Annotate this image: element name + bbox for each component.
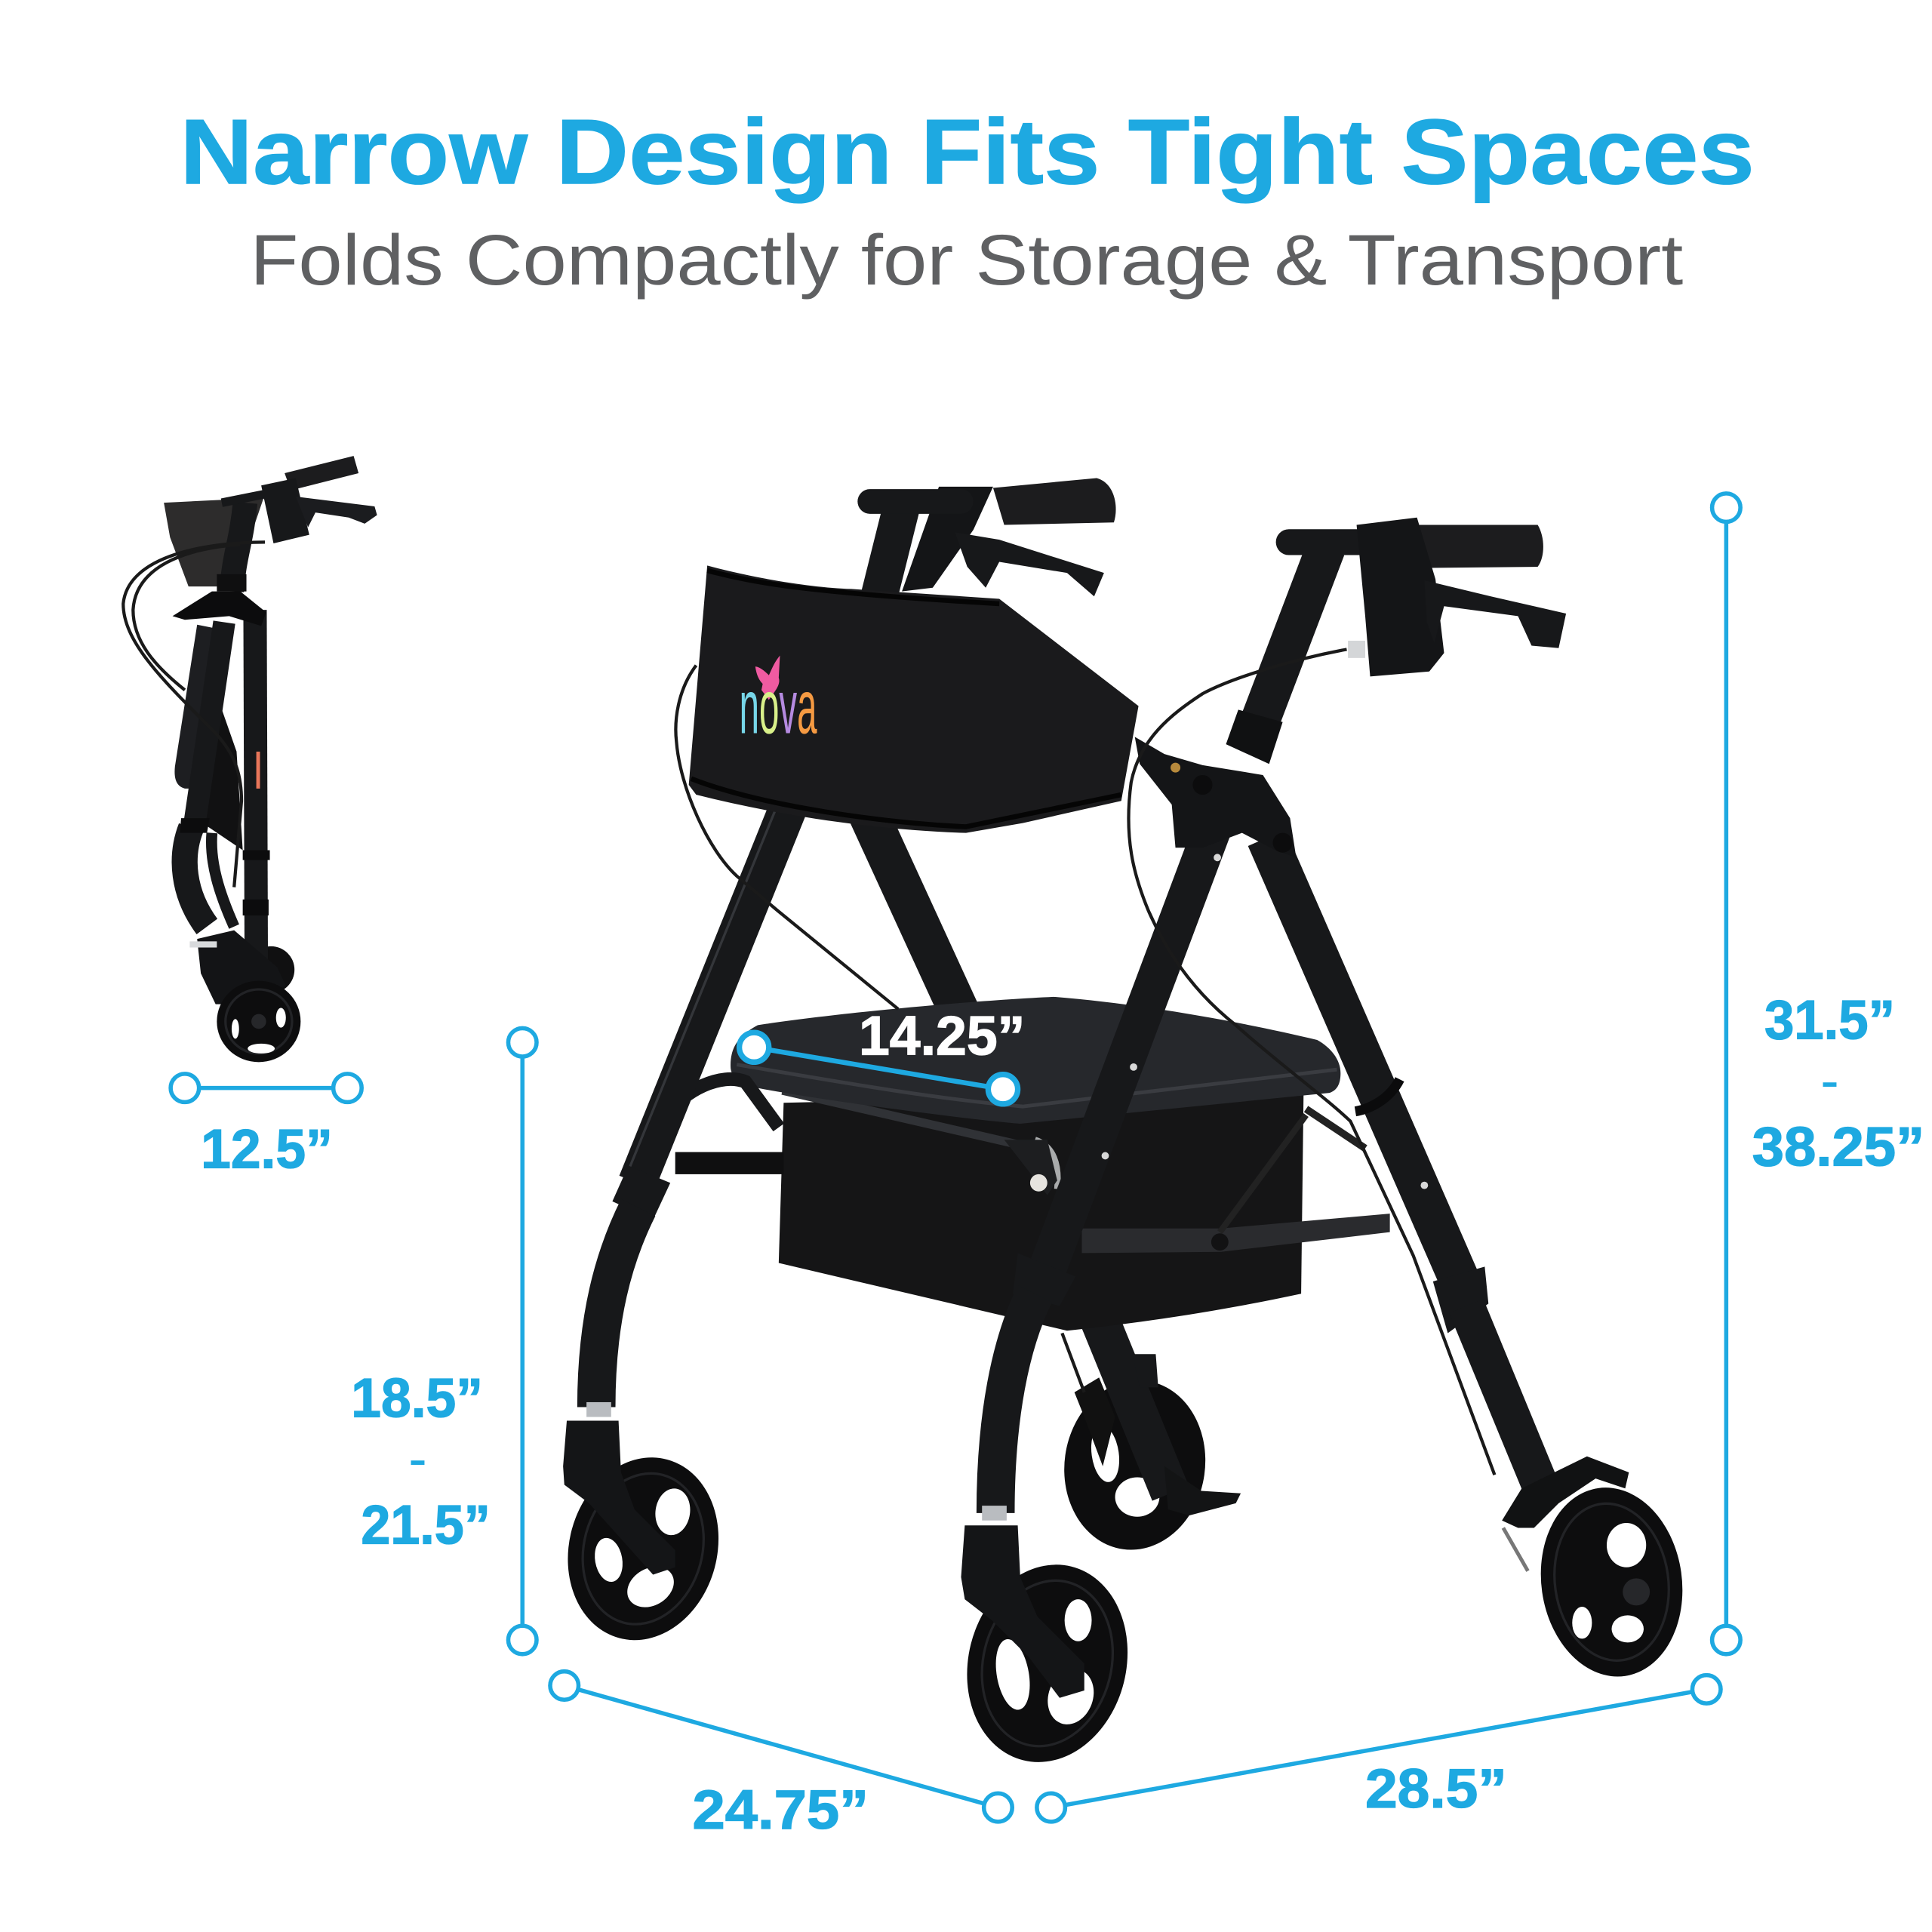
folded cables — [123, 542, 265, 888]
title: Narrow Design Fits Tight Spaces — [180, 100, 1755, 203]
rear center wheel — [1054, 1371, 1217, 1559]
subtitle: Folds Compactly for Storage & Transport — [250, 220, 1683, 300]
right handle — [1289, 518, 1566, 676]
main walker photo — [548, 478, 1694, 1780]
butterfly — [755, 656, 780, 700]
right rear wheel — [1529, 1478, 1694, 1686]
folded basket — [197, 703, 243, 851]
dimension: overall depth: 28.5” — [1365, 1757, 1507, 1820]
dimension: seat height: - — [408, 1427, 427, 1490]
folded walker photo — [123, 456, 377, 1062]
wordmark: nova — [740, 664, 817, 749]
center front wheel — [946, 1547, 1148, 1780]
folded legs — [180, 610, 270, 974]
left seat support — [666, 1079, 779, 1128]
rear center leg — [1099, 1318, 1171, 1494]
folded rear wheel — [248, 946, 294, 993]
folded backrest — [164, 498, 263, 586]
folded front wheel — [217, 981, 300, 1062]
dimension: overall height: 31.5” — [1764, 988, 1895, 1051]
dimension: folded width: 12.5” — [201, 1118, 333, 1180]
dimension: seat height — [351, 1028, 537, 1654]
center front leg — [982, 826, 1221, 1521]
left crossbar — [675, 1152, 783, 1174]
dimension: seat width: 14.25” — [859, 1004, 1025, 1067]
left front wheel — [548, 1441, 739, 1657]
dimension: overall depth — [1037, 1675, 1721, 1822]
hinge and right post — [1135, 549, 1326, 857]
basket — [779, 1091, 1303, 1331]
dimension: overall width: 24.75” — [693, 1778, 869, 1841]
rear left leg — [863, 801, 958, 1011]
brake pedal — [1164, 1466, 1241, 1515]
folded wheel hub — [197, 931, 286, 1004]
right rear brake — [1502, 1457, 1629, 1571]
cables — [675, 641, 1494, 1475]
seat cushion — [731, 997, 1340, 1124]
brake bracket — [1075, 1377, 1115, 1466]
dimension: overall width — [550, 1672, 1012, 1841]
folded bracket — [173, 592, 266, 626]
dimension: overall height: 38.25” — [1752, 1115, 1924, 1177]
dimension: seat height: 18.5” — [351, 1367, 483, 1429]
folded handle — [222, 456, 377, 543]
dimension: overall height: - — [1820, 1048, 1839, 1111]
dimension: folded width — [171, 1074, 361, 1180]
folded post — [232, 503, 245, 592]
dimension: seat height: 21.5” — [361, 1494, 491, 1556]
dimension: overall height — [1712, 494, 1924, 1654]
folded seat — [174, 625, 228, 789]
rear handle — [870, 478, 1116, 596]
left caster — [563, 1420, 675, 1575]
dimension: seat width — [740, 1004, 1025, 1104]
center caster — [961, 1525, 1084, 1698]
nova logo — [740, 656, 817, 749]
backrest — [689, 565, 1139, 833]
left front leg — [586, 777, 801, 1417]
right rear leg — [1266, 838, 1548, 1503]
front crossbar — [1081, 1109, 1390, 1253]
rear handle post — [877, 487, 993, 604]
basket frame — [783, 1091, 1058, 1195]
